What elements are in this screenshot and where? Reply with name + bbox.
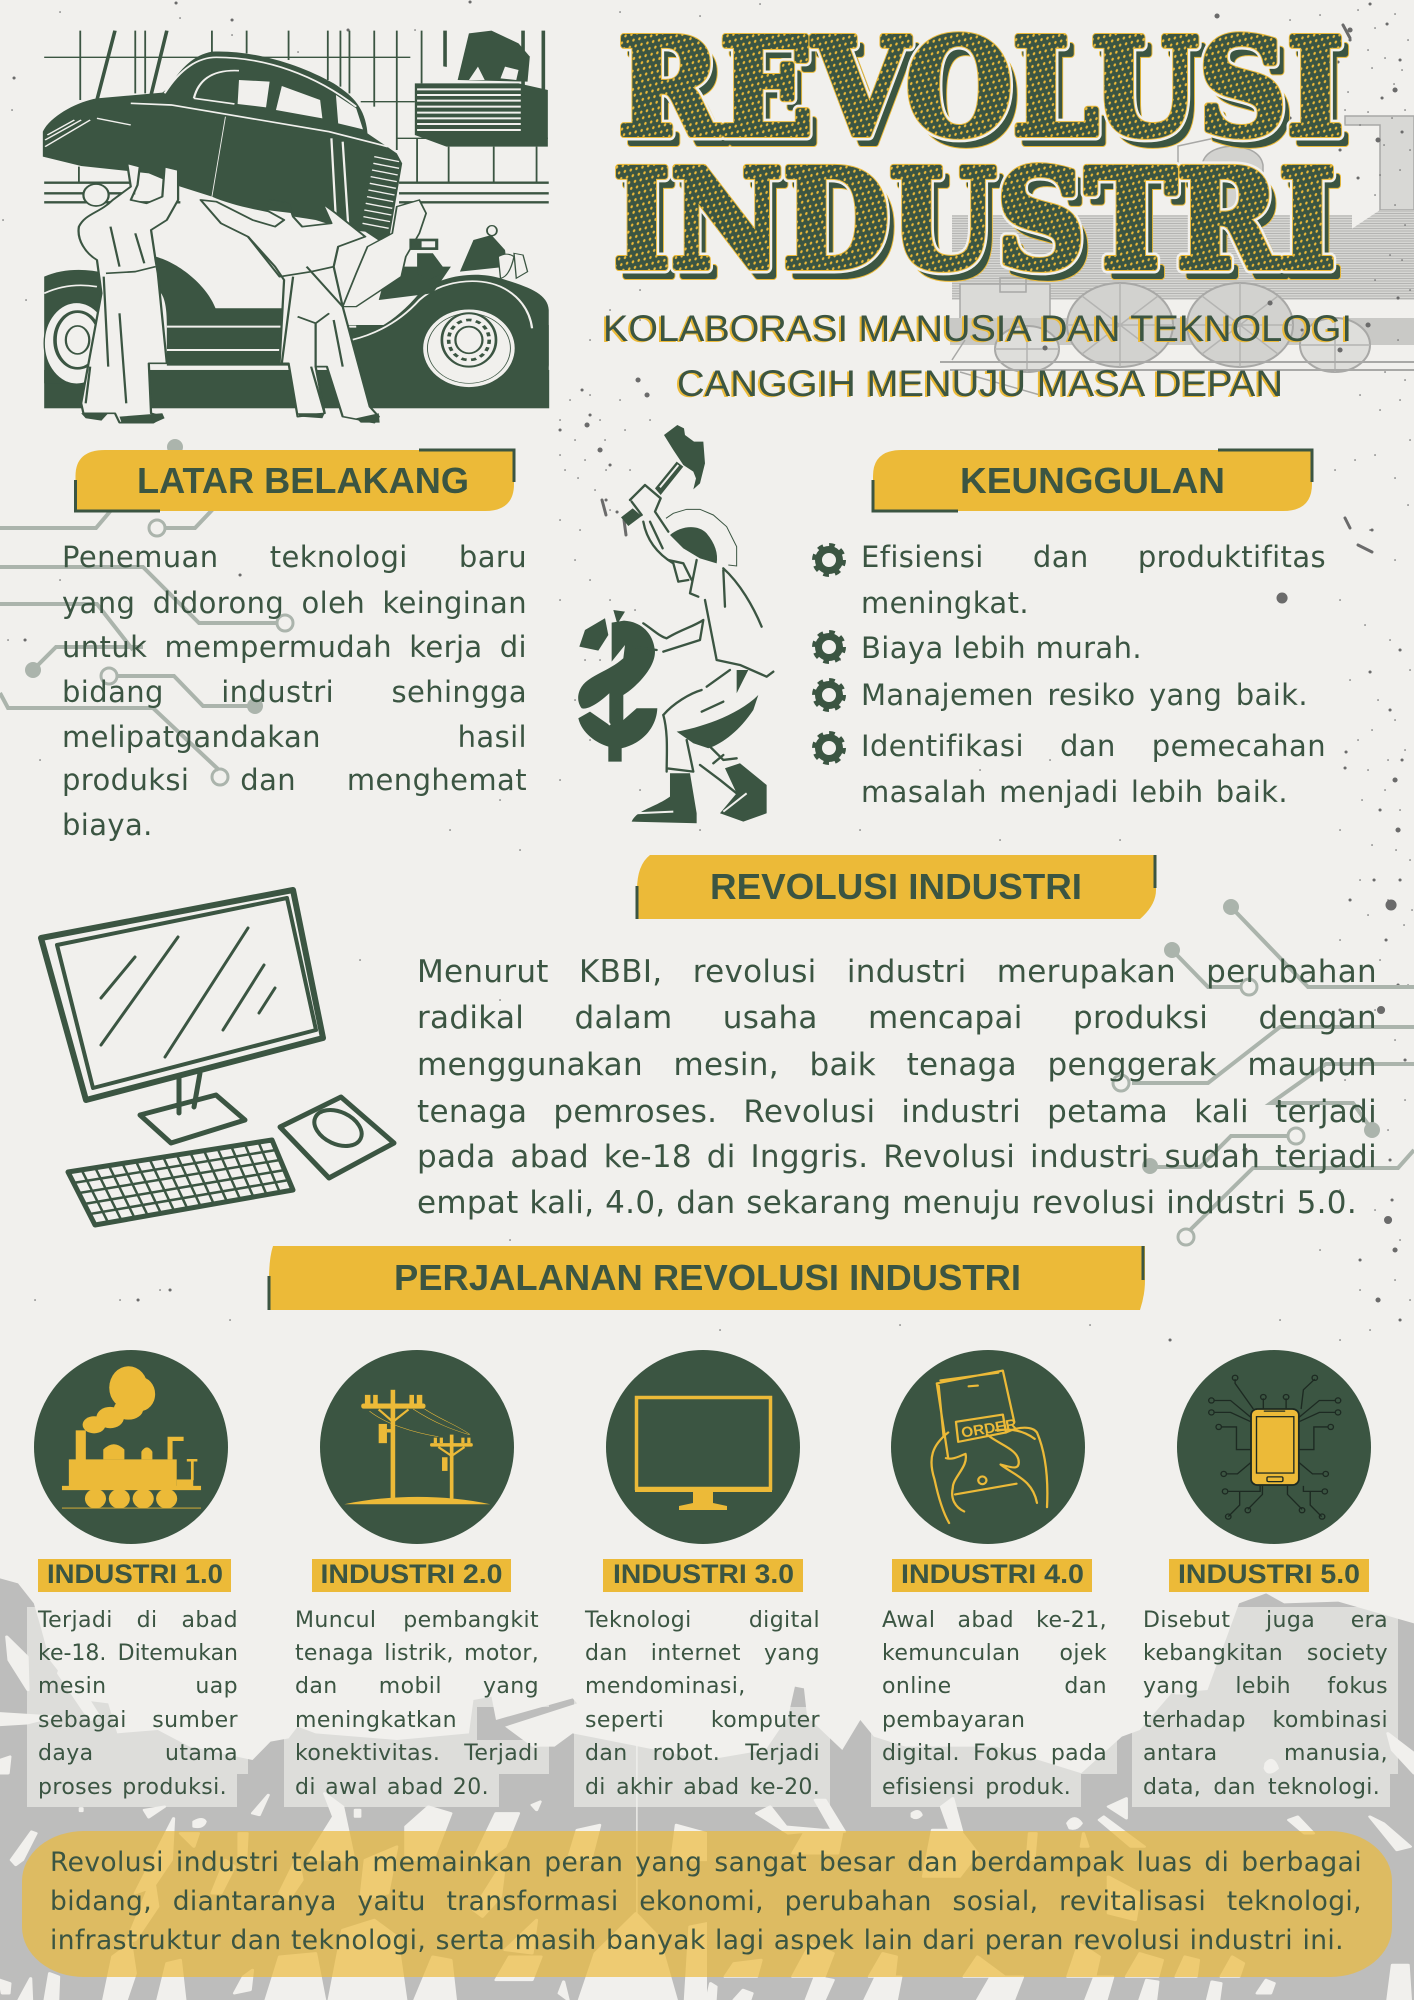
title: INDUSTRI: [613, 140, 1336, 300]
label: industri 5.0: INDUSTRI 5.0: [1178, 1559, 1360, 1589]
label: industri 3.0: INDUSTRI 3.0: [613, 1559, 794, 1589]
text block: industri 1.0: sebagai sumber: [38, 1708, 238, 1733]
text block: industri 2.0: Muncul pembangkit: [295, 1608, 539, 1633]
text block: keunggulan list: Biaya lebih murah.: [861, 631, 1142, 665]
title: REVOLUSI: [618, 10, 1344, 166]
text block: latar belakang: untuk mempermudah kerja di: [62, 630, 527, 664]
text block: conclusion: Revolusi industri telah memainkan peran yang sangat besar dan berdampak luas di berbagai: [50, 1847, 1362, 1878]
text block: industri 5.0: data, dan teknologi.: [1143, 1775, 1380, 1800]
icon: steam locomotive: [34, 1350, 228, 1544]
heading: latar belakang: LATAR BELAKANG: [137, 460, 469, 501]
subtitle: CANGGIH MENUJU MASA DEPAN: [677, 363, 1283, 404]
text block: revolusi industri definition: Menurut KBBI, revolusi industri merupakan perubahan: [417, 954, 1377, 990]
text block: industri 4.0: [871, 1608, 1117, 1807]
text block: industri 2.0: meningkatkan: [295, 1708, 457, 1733]
title: INDUSTRI: [613, 140, 1336, 300]
text block: industri 5.0: terhadap kombinasi: [1143, 1708, 1388, 1733]
text block: industri 5.0: kebangkitan society: [1143, 1641, 1388, 1666]
text block: industri 1.0: daya utama: [38, 1741, 238, 1766]
heading: revolusi industri: REVOLUSI INDUSTRI: [710, 866, 1082, 907]
text block: conclusion: bidang, diantaranya yaitu transformasi ekonomi, perubahan sosial, revitalisasi teknologi,: [50, 1886, 1362, 1917]
car body lifted: [43, 52, 402, 247]
subtitle: CANGGIH MENUJU MASA DEPAN: [675, 364, 1281, 405]
title: REVOLUSI: [625, 19, 1351, 175]
text block: industri 5.0: [1132, 1607, 1398, 1807]
text block: revolusi industri definition: [417, 954, 1377, 1221]
text block: industri 3.0: dan robot. Terjadi: [585, 1741, 820, 1766]
label: industri 1.0: INDUSTRI 1.0: [47, 1559, 223, 1589]
third worker: [343, 200, 446, 307]
right worker: [201, 200, 380, 423]
text block: keunggulan list: [861, 540, 1326, 809]
icon: hands ordering on phone: [891, 1350, 1085, 1544]
text block: revolusi industri definition: radikal dalam usaha mencapai produksi dengan: [417, 1000, 1377, 1036]
text block: latar belakang: yang didorong oleh keinginan: [62, 586, 527, 620]
title: REVOLUSI: [618, 10, 1344, 166]
text block: keunggulan list: meningkat.: [861, 586, 1029, 620]
title: REVOLUSI: [625, 19, 1351, 175]
text block: industri 4.0: kemunculan ojek: [882, 1641, 1107, 1666]
text block: keunggulan list: Identifikasi dan pemecahan: [861, 729, 1326, 763]
text block: industri 4.0: efisiensi produk.: [882, 1775, 1071, 1800]
title: [613, 10, 1351, 309]
text block: keunggulan list: masalah menjadi lebih baik.: [861, 775, 1288, 809]
icon: hands ordering on phone: ORDER: [960, 1416, 1018, 1441]
left worker: [79, 163, 178, 423]
illustration: computer monitor, keyboard and mouse: [41, 890, 394, 1225]
text block: industri 2.0: [284, 1608, 549, 1807]
text block: industri 1.0: ke-18. Ditemukan: [38, 1641, 238, 1666]
label: industri 4.0: INDUSTRI 4.0: [901, 1559, 1084, 1589]
illustration: man smashing dollar sign with hammer: [578, 425, 773, 823]
text block: latar belakang: produksi dan menghemat: [62, 763, 527, 797]
text block: industri 1.0: [27, 1607, 248, 1807]
text block: industri 1.0: Terjadi di abad: [38, 1608, 238, 1633]
circuit traces left: [0, 439, 293, 785]
subtitle: KOLABORASI MANUSIA DAN TEKNOLOGI: [601, 309, 1350, 350]
illustration: workers lifting car: [43, 31, 549, 423]
heading: perjalanan revolusi industri: PERJALANAN REVOLUSI INDUSTRI: [394, 1257, 1021, 1298]
subtitle: [601, 308, 1352, 405]
background: paint speckles: [3, 2, 1412, 1340]
text block: industri 3.0: dan internet yang: [585, 1641, 820, 1666]
heading: latar belakang: [76, 450, 514, 511]
car chassis and fenders: [44, 226, 549, 408]
text block: industri 3.0: seperti komputer: [585, 1708, 820, 1733]
title: INDUSTRI: [620, 149, 1343, 309]
icon: power poles: [320, 1350, 514, 1544]
heading: keunggulan: [873, 450, 1312, 511]
text block: industri 3.0: di akhir abad ke-20.: [585, 1775, 820, 1800]
heading: revolusi industri: [637, 855, 1156, 919]
text block: industri 2.0: konektivitas. Terjadi: [295, 1741, 539, 1766]
text block: industri 5.0: yang lebih fokus: [1143, 1674, 1388, 1699]
text block: industri 2.0: dan mobil yang: [295, 1674, 539, 1699]
text block: industri 4.0: pembayaran: [882, 1708, 1025, 1733]
text block: industri 4.0: Awal abad ke-21,: [882, 1608, 1107, 1633]
text block: latar belakang: [62, 540, 527, 842]
text block: industri 1.0: proses produksi.: [38, 1775, 227, 1800]
title: REVOLUSI: [618, 10, 1344, 166]
text block: conclusion: infrastruktur dan teknologi, serta masih banyak lagi aspek lain dari peran revolusi industri ini.: [50, 1925, 1344, 1956]
panel: conclusion pill: [22, 1831, 1392, 1977]
text block: revolusi industri definition: pada abad ke-18 di Inggris. Revolusi industri sudah terjadi: [417, 1139, 1377, 1175]
heading: keunggulan: KEUNGGULAN: [960, 460, 1225, 501]
heading: perjalanan revolusi industri: [269, 1246, 1145, 1310]
text block: conclusion: [50, 1847, 1362, 1956]
text block: industri 3.0: [574, 1608, 830, 1807]
text block: latar belakang: bidang industri sehingga: [62, 675, 527, 709]
text block: keunggulan list: Efisiensi dan produktifitas: [861, 540, 1326, 574]
text block: industri 3.0: Teknologi digital: [585, 1608, 820, 1633]
title: INDUSTRI: [620, 149, 1343, 309]
icon: smartphone with circuit: [1177, 1350, 1371, 1544]
label: industri 2.0: INDUSTRI 2.0: [320, 1559, 502, 1589]
background: crowd silhouette: [0, 1578, 1414, 2000]
text block: keunggulan list: Manajemen resiko yang baik.: [861, 678, 1308, 712]
icon: computer screen: [606, 1350, 800, 1544]
text block: industri 2.0: tenaga listrik, motor,: [295, 1641, 539, 1666]
text block: industri 5.0: Disebut juga era: [1143, 1608, 1388, 1633]
text block: revolusi industri definition: empat kali, 4.0, dan sekarang menuju revolusi industri 5.0.: [417, 1185, 1357, 1221]
text block: industri 4.0: digital. Fokus pada: [882, 1741, 1107, 1766]
text block: revolusi industri definition: menggunakan mesin, baik tenaga penggerak maupun: [417, 1047, 1377, 1083]
gear bullets: [814, 546, 844, 762]
text block: revolusi industri definition: tenaga pemroses. Revolusi industri petama kali terjadi: [417, 1094, 1377, 1130]
text block: industri 1.0: mesin uap: [38, 1674, 238, 1699]
text block: industri 5.0: antara manusia,: [1143, 1741, 1388, 1766]
title: INDUSTRI: [613, 140, 1336, 300]
text block: industri 3.0: mendominasi,: [585, 1674, 746, 1699]
text block: latar belakang: biaya.: [62, 808, 153, 842]
text block: latar belakang: Penemuan teknologi baru: [62, 540, 527, 574]
text block: industri 2.0: di awal abad 20.: [295, 1775, 489, 1800]
circuit traces right: [1113, 899, 1414, 1245]
text block: latar belakang: melipatgandakan hasil: [62, 720, 527, 754]
text block: industri 4.0: online dan: [882, 1674, 1107, 1699]
subtitle: KOLABORASI MANUSIA DAN TEKNOLOGI: [603, 308, 1352, 349]
background: train illustration: [940, 116, 1414, 395]
